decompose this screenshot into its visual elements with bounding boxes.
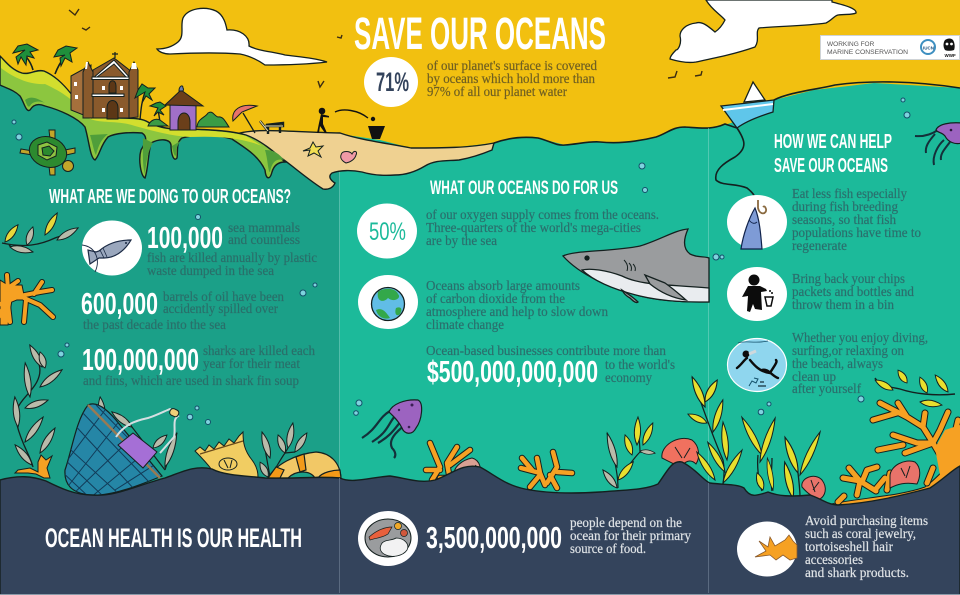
stat: 600,000 barrels: 600,000 (81, 286, 158, 321)
logo panel: WWF (944, 53, 956, 58)
stat: 600,000 barrels: accidently spilled over (163, 302, 278, 317)
tip: eat less fish: Eat less fish especially (792, 187, 907, 202)
stat: 100,000,000 sharks: 100,000,000 (82, 342, 199, 377)
tip: clean up after yourself: after yourself (792, 382, 861, 397)
palms back (13, 44, 77, 74)
stat: 50 percent oxygen: are by the sea (426, 234, 498, 249)
land lime band (1, 58, 262, 146)
seaweed mid left (12, 344, 64, 467)
tip: clean up after yourself (728, 331, 928, 397)
tip: eat less fish: populations have time to (792, 226, 921, 241)
birds (69, 9, 702, 87)
stat: carbon dioxide: of carbon dioxide from the (426, 292, 565, 307)
text: oceans coverage (427, 59, 597, 100)
tip: avoid purchasing: such as coral jewelry, (805, 527, 916, 542)
stat: 100,000 sea mammals: 100,000 (147, 220, 223, 255)
text: oceans coverage: 97% of all our planet water (427, 85, 567, 100)
seaweed top left (2, 212, 80, 255)
stat: 500 billion: to the world's (605, 358, 675, 373)
tip: eat less fish: seasons, so that fish (792, 213, 896, 228)
tip: avoid purchasing: accessories (805, 553, 863, 568)
seaweed near fishing text (874, 368, 955, 408)
panel divider ground (340, 478, 708, 593)
stat: 71 percent (364, 57, 418, 107)
parasol and deck chair (233, 105, 283, 134)
tip: avoid purchasing: and shark products. (805, 566, 909, 581)
beach (240, 131, 494, 189)
fish icon (82, 220, 142, 276)
land dark drips (25, 98, 284, 174)
tip: avoid purchasing (737, 514, 928, 581)
tip: bring back litter: throw them in a bin (792, 298, 894, 313)
stat: 500 billion: economy (605, 371, 652, 386)
logo panel (820, 35, 960, 60)
icon: coral (737, 522, 797, 576)
jellyfish centre (362, 400, 422, 458)
stat: carbon dioxide: climate change (426, 318, 504, 333)
yellow seaweed centre right (687, 376, 823, 499)
stat: 100,000,000 sharks (82, 342, 315, 389)
church (71, 52, 138, 119)
stat: 600,000 barrels (81, 286, 284, 333)
hut (165, 86, 203, 130)
tip: bring back litter: packets and bottles and (792, 285, 914, 300)
stat: 3.5 billion: source of food. (570, 542, 646, 557)
logo panel: WORKING FOR (827, 41, 875, 48)
stat: carbon dioxide (358, 275, 608, 333)
stat: 100,000 sea mammals: and countless (228, 233, 300, 248)
heading: what our oceans do: WHAT OUR OCEANS DO FOR US (430, 178, 618, 199)
life ring (268, 452, 341, 478)
tip: clean up after yourself: clean up (792, 370, 836, 385)
panel: centre and right ocean (340, 83, 960, 595)
coastline stroke (494, 124, 757, 204)
logo panel: MARINE CONSERVATION (827, 49, 908, 56)
boat (721, 82, 774, 128)
person throwing litter (317, 108, 385, 139)
stat: 3.5 billion: 3,500,000,000 (426, 520, 562, 555)
text: oceans coverage: by oceans which hold more than (427, 72, 595, 87)
heading: what are we doing: WHAT ARE WE DOING TO OUR OCEANS? (49, 186, 291, 208)
stat: 100,000 sea mammals: sea mammals (228, 221, 300, 236)
title: SAVE OUR OCEANS (354, 8, 606, 59)
stat: 100,000 sea mammals: fish are killed annually by plastic (147, 251, 317, 266)
stat: 100,000 sea mammals: waste dumped in the sea (147, 264, 275, 279)
stat: 100,000,000 sharks: and fins, which are used in shark fin soup (83, 374, 299, 389)
land (0, 56, 285, 178)
chip packet (195, 432, 258, 478)
tip: eat less fish: during fish breeding (792, 200, 898, 215)
sea surface stroke right (774, 82, 960, 100)
panel dividers (340, 128, 708, 595)
stat: 50 percent oxygen (357, 204, 659, 258)
yellow seaweed centre (601, 417, 656, 490)
turtle (20, 130, 75, 175)
stat: 600,000 barrels: barrels of oil have been (163, 290, 284, 305)
palms and bushes by hut (135, 84, 229, 127)
cloud left (157, 8, 327, 65)
icon: fish plate (358, 511, 418, 566)
plastic bottle (116, 408, 180, 468)
tip: avoid purchasing: tortoiseshell hair (805, 540, 893, 555)
panel: left ocean (0, 84, 340, 595)
stat: 600,000 barrels: the past decade into the sea (83, 318, 227, 333)
text: oceans coverage: of our planet's surface is covered (427, 59, 597, 74)
small coral seafloor left (15, 455, 52, 478)
heading: how we can help (774, 131, 892, 177)
tip: bring back litter: Bring back your chips (792, 272, 905, 287)
stat: 50 percent oxygen: of our oxygen supply comes from the oceans. (426, 208, 659, 223)
stat: 3.5 billion (358, 511, 691, 566)
shark (563, 229, 709, 303)
stat: 100,000 sea mammals (82, 220, 317, 279)
big orange coral right (831, 403, 960, 507)
stat: 50 percent oxygen: Three-quarters of the world's mega-cities (426, 221, 641, 236)
icon: diver (728, 338, 786, 392)
tip: clean up after yourself: the beach, always (792, 357, 883, 372)
pink coral cluster (454, 438, 920, 499)
tip: clean up after yourself: Whether you enjoy diving, (792, 331, 928, 346)
stat: 500 billion: $500,000,000,000 (427, 354, 598, 389)
tip: bring back litter (727, 267, 914, 321)
bubbles (12, 98, 910, 424)
corals centre (426, 443, 572, 488)
logo panel: IUCN (923, 46, 934, 50)
seabed (0, 462, 960, 595)
icon: person at bin (727, 267, 787, 321)
stat: 3.5 billion: people depend on the (570, 516, 682, 531)
tip: eat less fish (727, 187, 921, 254)
stat: carbon dioxide: Oceans absorb large amounts (426, 279, 580, 294)
jellyfish top right (915, 123, 960, 165)
stat: 3.5 billion: ocean for their primary (570, 529, 691, 544)
left litter seaweed (97, 397, 309, 478)
cloud right (670, 0, 856, 62)
fishing net (64, 403, 163, 494)
icon: globe (358, 275, 418, 329)
icon: fish on hook (727, 195, 787, 249)
tip: avoid purchasing: Avoid purchasing items (805, 514, 928, 529)
stat: 50 percent oxygen: 50% (369, 218, 406, 246)
starfish (303, 142, 323, 157)
bottom slogan: OCEAN HEALTH IS OUR HEALTH (45, 523, 302, 553)
stat: 100,000,000 sharks: year for their meat (203, 357, 300, 372)
stat: 100,000,000 sharks: sharks are killed each (203, 344, 315, 359)
orange coral left (0, 275, 53, 325)
stat: 71 percent: 71% (376, 67, 409, 97)
stat: 500 billion: Ocean-based businesses contribute more than (426, 344, 666, 359)
tip: eat less fish: regenerate (792, 239, 847, 254)
tip: clean up after yourself: surfing,or relaxing on (792, 344, 904, 359)
shell (341, 151, 357, 163)
stat: carbon dioxide: atmosphere and help to slow down (426, 305, 608, 320)
